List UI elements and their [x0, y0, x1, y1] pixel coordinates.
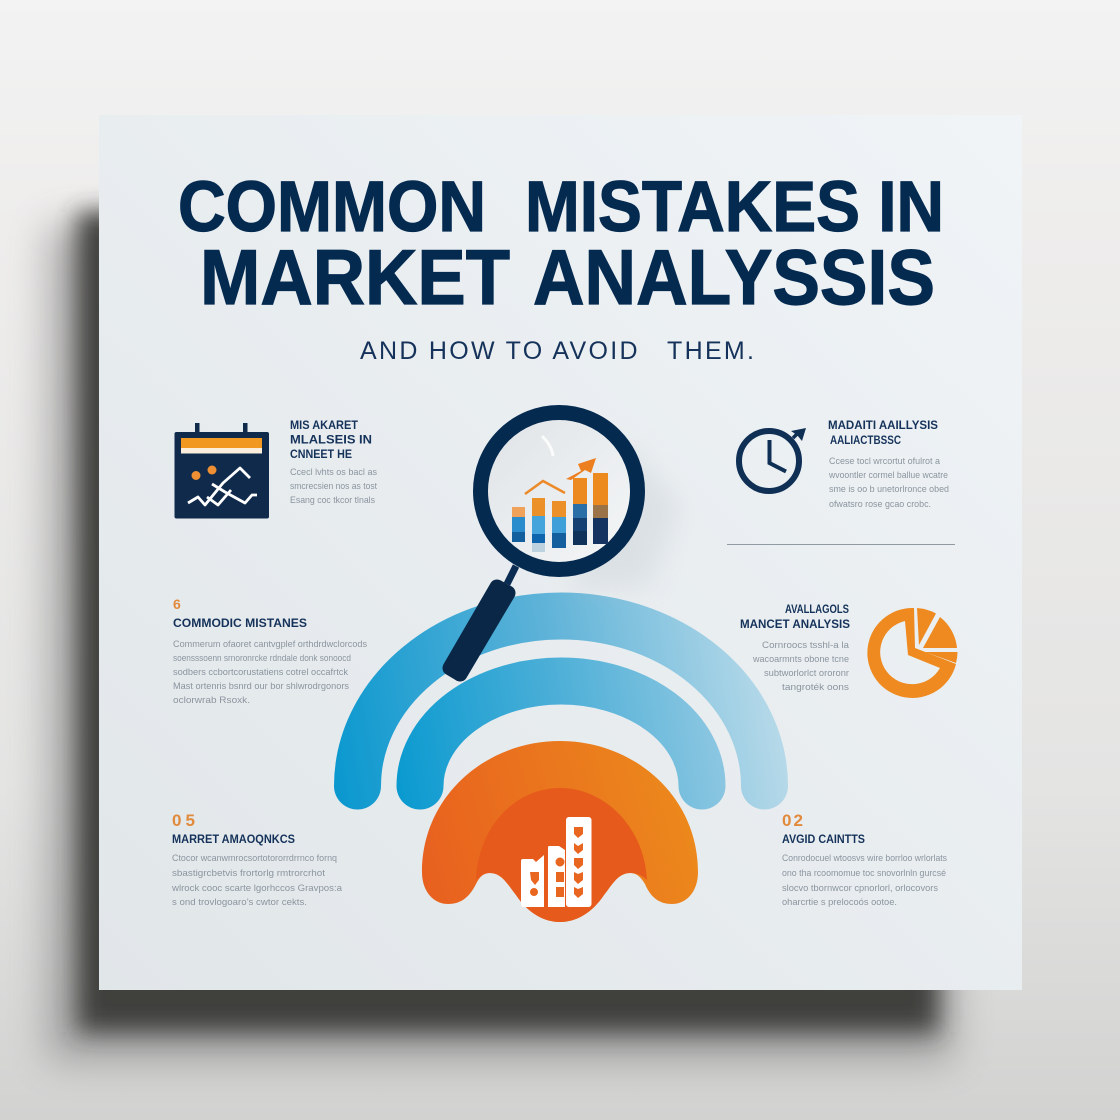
title: MISTAKES IN — [525, 168, 944, 247]
text block — [782, 853, 947, 908]
lens — [480, 412, 638, 570]
text block: sme is oo b unetorlronce obed — [829, 484, 949, 495]
handle — [507, 566, 516, 584]
text block — [290, 467, 377, 506]
heading: AVALLAGOLS — [785, 604, 849, 616]
text block: tangroték oons — [782, 682, 849, 693]
text block: wvoontler cormel ballue wcatre — [828, 470, 948, 481]
icon: clock with arrow — [739, 428, 806, 491]
chart: blue arcs — [358, 616, 764, 786]
lens highlight — [542, 436, 553, 456]
text block: sodbers ccbortcorustatiens cotrel occafrtck — [173, 667, 348, 678]
icon: calendar chart — [174, 423, 269, 518]
text block: slocvo tbornwcor cpnorlorl, orlocovors — [782, 883, 938, 894]
heading: MLALSEIS IN — [290, 434, 372, 446]
text block: sbastigrcbetvis frortorlg rmtrorcrhot — [172, 868, 325, 879]
title: COMMON — [178, 168, 486, 247]
text block: Ctocor wcanwmrocsortotororrdrrnco fornq — [172, 853, 337, 864]
heading: MIS AKARET — [290, 420, 358, 432]
text block: oclorwrab Rsoxk. — [173, 695, 250, 706]
text block — [171, 853, 343, 908]
arc: outer — [358, 616, 764, 786]
heading: AVGID CAINTTS — [782, 834, 865, 846]
heading: AALIACTBSSC — [830, 435, 901, 447]
icon: magnifying glass — [450, 412, 680, 674]
arc: inner — [420, 681, 702, 786]
panel: bottom left block — [171, 811, 343, 908]
heading — [828, 420, 938, 447]
text block — [752, 640, 850, 693]
text block: oharcrtie s prelocoós ootoe. — [782, 897, 897, 908]
lens chart — [512, 473, 608, 552]
subtitle: AND HOW TO AVOID THEM. — [360, 337, 754, 365]
number: 6 — [173, 596, 181, 612]
title: ANALYSSIS — [533, 233, 935, 321]
heading — [740, 604, 850, 631]
text block: soensssoenn srnoronrcke rdndale donk sonoocd — [173, 653, 351, 664]
heading: CNNEET HE — [290, 449, 352, 461]
chart line — [525, 481, 565, 494]
heading: MADAITI AAILLYSIS — [828, 420, 938, 432]
dome — [422, 741, 698, 922]
divider line — [727, 544, 955, 546]
text block: Conrodocuel wtoosvs wire borrloo wrlorlats — [782, 853, 947, 864]
title — [178, 168, 944, 321]
text block: ofwatsro rose gcao crobc. — [829, 499, 931, 510]
panel: middle left block — [173, 596, 367, 706]
text block: Cornroocs tsshl-a la — [762, 640, 850, 651]
text block: Ccese tocl wrcortut ofulrot a — [829, 456, 941, 467]
building bars — [521, 817, 592, 907]
text block: Ccecl lvhts os bacl as — [290, 467, 377, 478]
text block: ono tha rcoomomue toc snovorlnln gurcsé — [782, 868, 946, 879]
heading: MARRET AMAOQNKCS — [172, 834, 295, 846]
poster drop shadow — [48, 212, 953, 1060]
lens shadow — [570, 440, 680, 590]
inner circle — [476, 788, 647, 922]
text block — [828, 456, 949, 510]
number: 05 — [172, 811, 195, 830]
text block: Mast ortenris bsnrd our bor shlwrodrgonors — [173, 681, 349, 692]
text block: s ond trovlogoaro’s cwtor cekts. — [172, 897, 307, 908]
icon: pie chart — [867, 608, 958, 698]
panel: top left calendar block — [174, 420, 377, 518]
heading — [290, 420, 372, 461]
poster panel — [99, 115, 1022, 990]
heading: COMMODIC MISTANES — [173, 618, 307, 630]
text block: wlrock cooc scarte lgorhccos Gravpos:a — [171, 883, 343, 894]
number: 02 — [782, 811, 803, 830]
panel: middle right block — [740, 604, 958, 698]
text block: smcrecsien nos as tost — [290, 481, 377, 492]
heading: MANCET ANALYSIS — [740, 619, 850, 631]
text block: subtworlorlct ororonr — [764, 668, 849, 679]
icon: orange dome with building — [422, 741, 698, 922]
text block — [173, 639, 367, 706]
chart arrow — [566, 458, 596, 480]
panel: top right clock block — [739, 420, 949, 510]
panel: bottom right block — [782, 811, 947, 908]
text block: Esang coc tkcor tlnals — [290, 495, 375, 506]
building windows — [530, 827, 583, 898]
title: MARKET — [200, 233, 510, 321]
text block: Commerum ofaoret cantvgplef orthdrdwclorcods — [173, 639, 367, 650]
text block: wacoarmnts obone tcne — [752, 654, 849, 665]
